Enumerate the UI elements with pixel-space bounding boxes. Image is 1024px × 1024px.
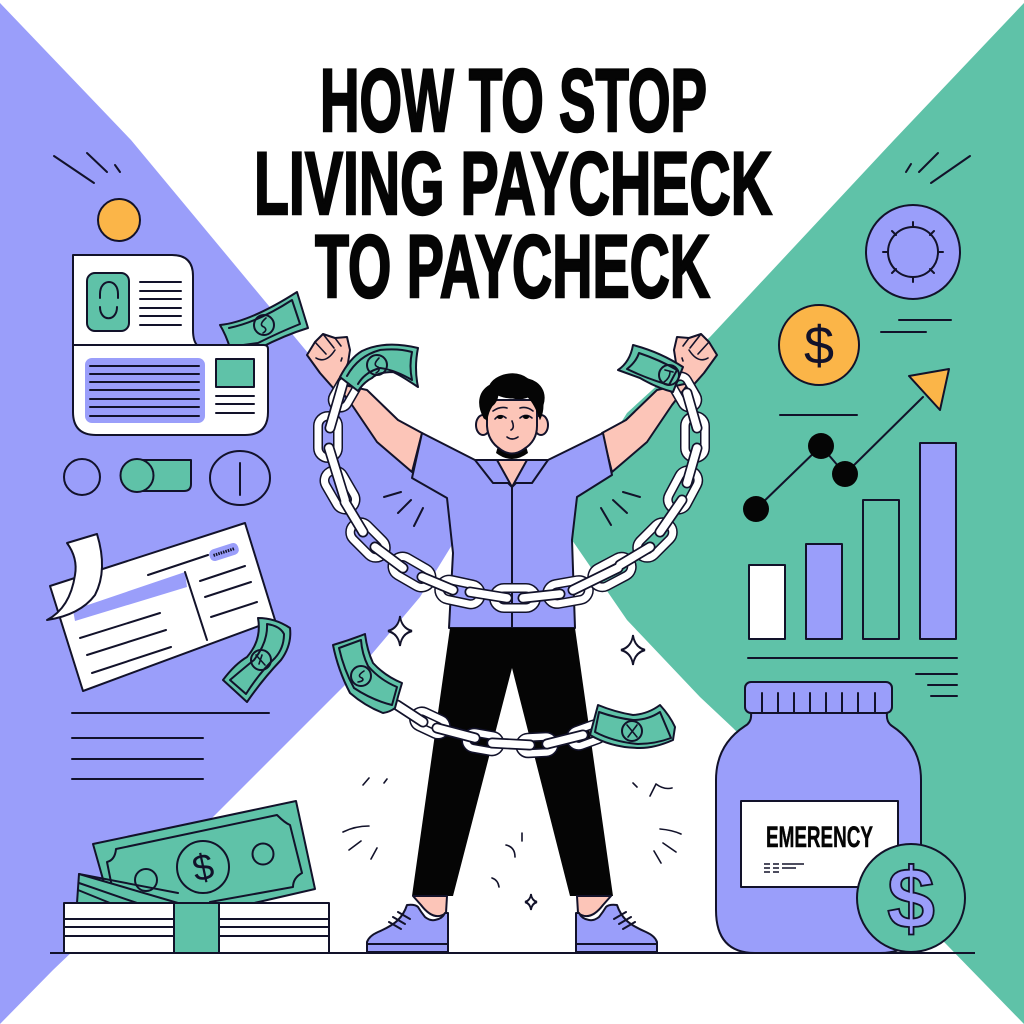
shirt (412, 433, 612, 628)
left arm and fist (307, 334, 422, 472)
panel: right growth charts (743, 153, 970, 696)
leg chain links (397, 705, 606, 754)
background: green right triangle (555, 3, 1024, 1024)
jar lid (745, 682, 892, 713)
big banknote: $ (189, 845, 217, 890)
face details (493, 407, 533, 439)
icon: sparkle right (621, 635, 645, 665)
stack of bills (64, 903, 329, 953)
head (476, 374, 548, 459)
panel: emergency jar (716, 682, 965, 953)
cheque curled corner (47, 534, 102, 620)
icon: banknote on cheque (223, 618, 290, 702)
title: HOW TO STOP (320, 50, 707, 150)
icon: lavender gear circle (866, 205, 960, 299)
right arm and fist (602, 334, 717, 472)
icon: flying banknote behind document (220, 292, 308, 348)
line chart with arrow (743, 369, 949, 522)
chain edge links (329, 383, 697, 598)
icon: left leg banknote (333, 634, 402, 713)
jar body (716, 713, 921, 953)
panel: cheque with curled corner (47, 523, 290, 702)
icon: banknote at left wrist (340, 345, 418, 391)
icon: sparkle left (388, 616, 412, 646)
pants (412, 628, 613, 896)
icon: orange dollar coin (779, 305, 859, 385)
cheque body (50, 523, 275, 691)
jar label (741, 801, 898, 887)
document: upper page (73, 255, 198, 346)
panel: cash stack (64, 801, 329, 953)
spark lines above coin (54, 153, 120, 183)
motion marks around legs (343, 778, 681, 887)
jar label: EMERENCY (766, 821, 873, 854)
character (307, 334, 717, 952)
document: lower page (73, 345, 268, 435)
background: lavender left triangle (0, 3, 470, 1024)
icon: sparkle small (525, 894, 537, 910)
big banknote (93, 801, 315, 904)
title (254, 50, 772, 316)
folded notes (77, 874, 178, 903)
spark lines above gear (906, 153, 970, 183)
chain open links (318, 373, 705, 608)
lower chain across legs (333, 634, 675, 754)
hair (480, 374, 544, 420)
cheque tag (208, 542, 240, 562)
left foot (367, 896, 448, 952)
icon: orange coin (98, 199, 140, 241)
motion marks near shirt (384, 492, 640, 526)
right foot (576, 896, 657, 952)
cheque lines (80, 555, 257, 673)
icon: green dollar coin (857, 844, 965, 952)
icon: orange dollar coin: $ (804, 316, 834, 376)
icon: right leg banknote (590, 705, 675, 748)
text placeholder lines (72, 713, 269, 779)
controls row: circle, toggle, dial (64, 451, 270, 505)
panel: left budget documents (54, 153, 308, 505)
upper chain across waist (318, 373, 705, 608)
bar chart (749, 443, 956, 639)
icon: green dollar coin: $ (887, 851, 935, 947)
cheque highlight band (73, 572, 187, 621)
title: TO PAYCHECK (315, 216, 710, 316)
chart baseline and marks (748, 658, 957, 696)
ground line (50, 952, 975, 954)
icon: banknote at right wrist (618, 345, 683, 392)
decorative short lines (780, 320, 951, 415)
